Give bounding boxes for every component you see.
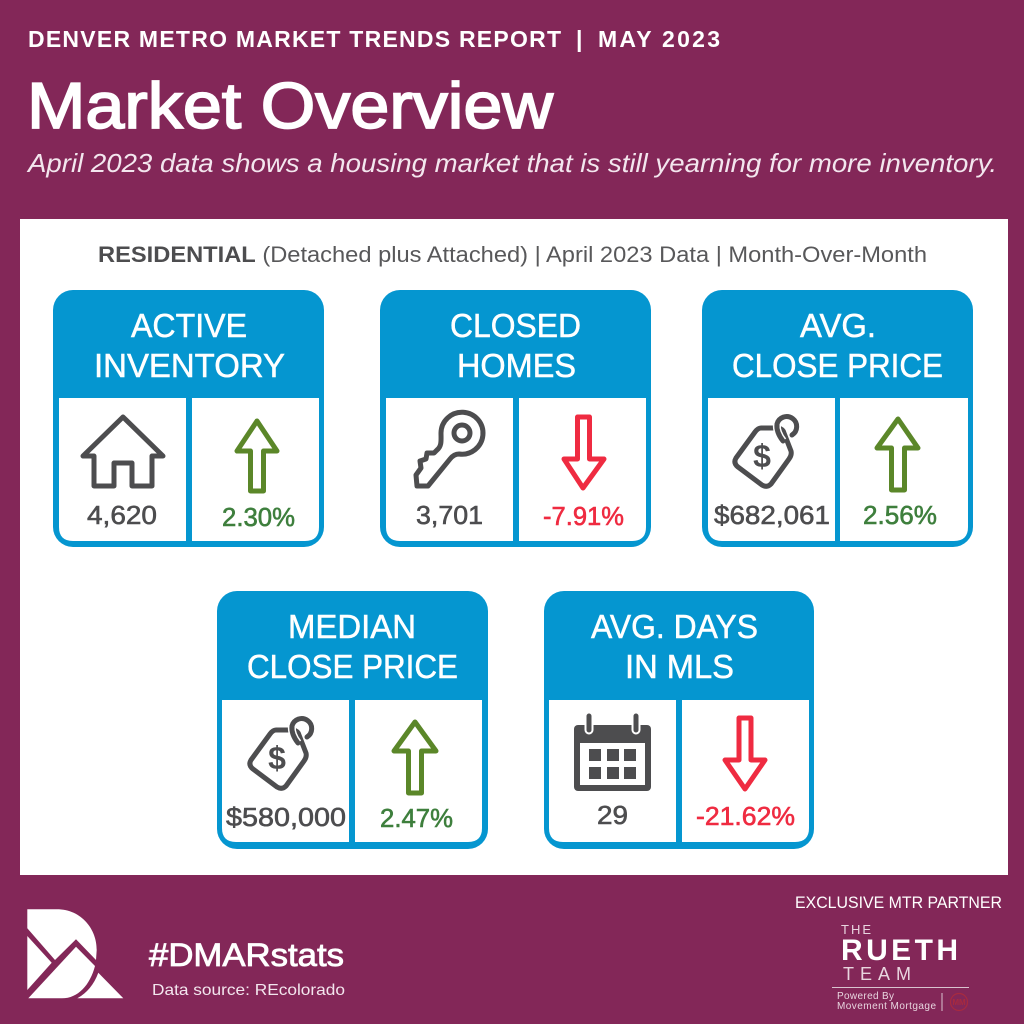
arrow: down (564, 417, 604, 488)
arrow: up (237, 421, 277, 491)
card title: average days in MLS: IN MLS (625, 648, 734, 685)
panel subheading: RESIDENTIAL (Detached plus Attached) | April 2023 Data | Month-Over-Month (98, 242, 927, 267)
icon: calendar (574, 716, 651, 791)
icon: price tag: $ (753, 438, 771, 474)
card: active inventory (53, 290, 324, 547)
logo: The Rueth Team: Powered By (837, 991, 894, 1002)
card title: median close price: CLOSE PRICE (247, 648, 458, 685)
icon: price tag: $ (268, 740, 286, 776)
logo: The Rueth Team: Movement Mortgage (837, 1001, 936, 1012)
change: average close price: 2.56% (863, 500, 937, 530)
change: active inventory: 2.30% (222, 502, 295, 532)
card title: active inventory: ACTIVE (131, 307, 247, 344)
subtitle: April 2023 data shows a housing market that is still yearning for more inventory. (26, 148, 997, 178)
value: average close price: $682,061 (714, 500, 830, 530)
report heading: MAY 2023 (598, 26, 720, 52)
card: average days in MLS (544, 591, 814, 849)
card title: average days in MLS (591, 608, 758, 685)
logo: The Rueth Team: RUETH (841, 934, 958, 967)
logo: The Rueth Team (832, 922, 969, 1012)
icon: key (416, 412, 483, 486)
change: median close price: 2.47% (380, 803, 453, 833)
value: closed homes: 3,701 (416, 500, 483, 530)
arrow: down (725, 718, 765, 789)
panel: white content area (20, 219, 1008, 875)
card title: closed homes (450, 307, 581, 384)
change: average days in MLS: -21.62% (696, 801, 795, 831)
report heading: | (576, 26, 582, 52)
card title: closed homes: HOMES (457, 347, 576, 384)
card title: active inventory (94, 307, 285, 384)
hashtag: #DMARstats (149, 937, 344, 973)
card title: average close price: AVG. (800, 307, 876, 344)
report heading: DENVER METRO MARKET TRENDS REPORT (28, 26, 561, 52)
data source: Data source: REcolorado (152, 982, 345, 999)
value: median close price: $580,000 (226, 802, 346, 832)
logo: DMAR (27, 909, 123, 998)
card: average close price (702, 290, 973, 547)
card title: closed homes: CLOSED (450, 307, 581, 344)
arrow: up (394, 722, 436, 793)
logo: The Rueth Team: THE (841, 922, 871, 937)
card title: average days in MLS: AVG. DAYS (591, 608, 758, 645)
logo: The Rueth Team: MM (952, 998, 966, 1007)
card title: average close price (732, 307, 943, 384)
card title: median close price (247, 608, 458, 685)
card: median close price (217, 591, 488, 849)
title: Market Overview (27, 69, 554, 142)
card title: median close price: MEDIAN (288, 608, 416, 645)
icon: price tag (250, 719, 312, 788)
card title: active inventory: INVENTORY (94, 347, 285, 384)
card: closed homes (380, 290, 651, 547)
value: active inventory: 4,620 (87, 500, 157, 530)
arrow: up (877, 419, 918, 490)
partner label: EXCLUSIVE MTR PARTNER (795, 893, 1002, 912)
change: closed homes: -7.91% (543, 501, 624, 531)
icon: price tag (735, 417, 797, 486)
icon: house (83, 417, 163, 486)
card title: average close price: CLOSE PRICE (732, 347, 943, 384)
value: average days in MLS: 29 (597, 800, 628, 830)
logo: The Rueth Team: TEAM (843, 964, 911, 984)
